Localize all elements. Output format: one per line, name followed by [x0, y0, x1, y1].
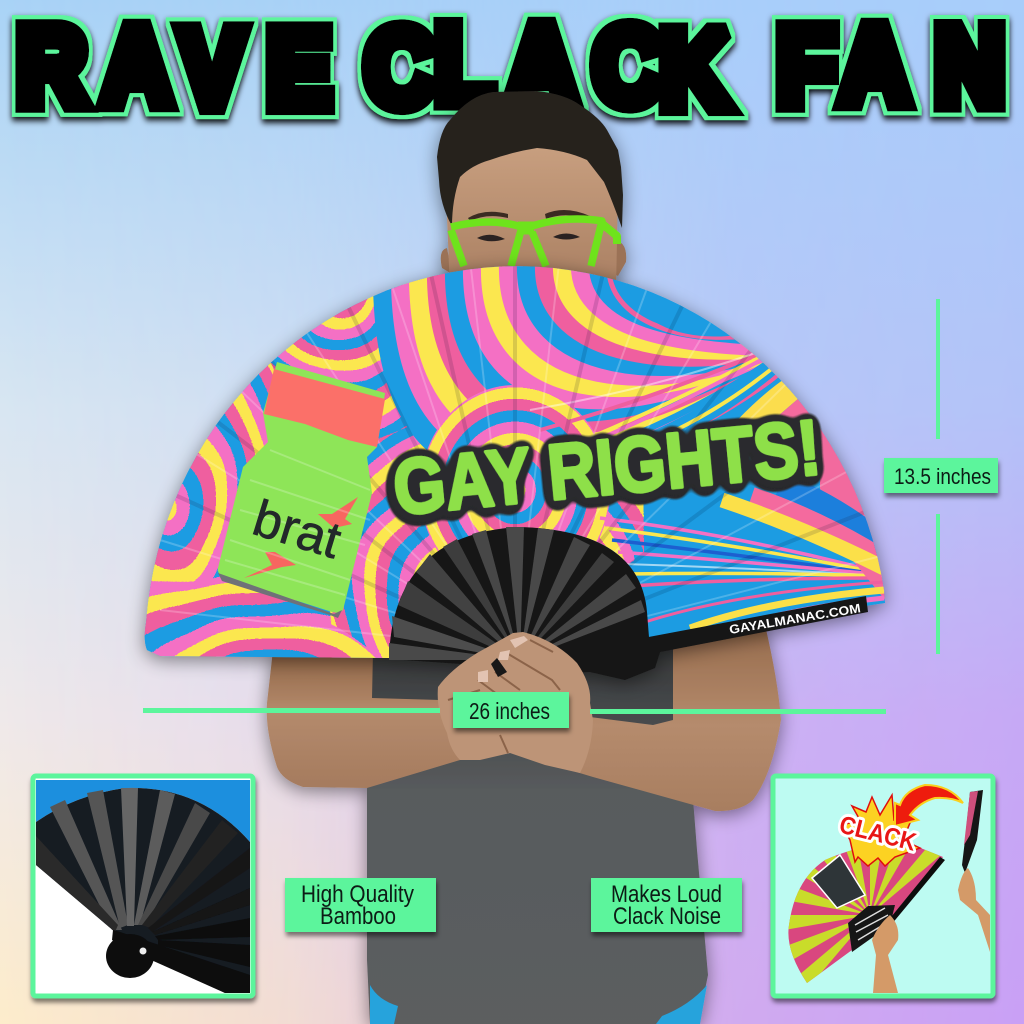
- finger lines: [448, 640, 560, 753]
- fingernails: [478, 636, 528, 682]
- lightning top: [318, 497, 358, 528]
- swirl bands top: [373, 266, 766, 450]
- inset panel: bamboo: [33, 776, 253, 996]
- shirt: [367, 630, 708, 1024]
- blue fabric: [36, 780, 250, 842]
- bottle red band: [264, 369, 385, 447]
- inset frame: [33, 776, 253, 996]
- small open fan: [788, 848, 945, 983]
- bottle: [218, 362, 385, 618]
- black bamboo ribs: [389, 527, 650, 668]
- hair: [437, 91, 623, 228]
- label: 26 inches: [453, 692, 569, 728]
- shorts: [370, 985, 707, 1024]
- small ribs: [848, 905, 895, 952]
- label: 13.5 inches: 13.5 inches: [894, 464, 991, 489]
- fabric base: [144, 266, 888, 658]
- clack word: CLACK: [837, 811, 919, 857]
- inset panel: clack demo: [760, 776, 993, 999]
- ears: [441, 240, 626, 276]
- label: makes loud clack noise: [591, 878, 742, 932]
- eyebrows: [468, 210, 590, 221]
- pivot: [106, 934, 154, 978]
- rib slats: [36, 788, 250, 967]
- ribs background: [36, 788, 250, 993]
- label: high quality bamboo: High Quality: [301, 881, 414, 908]
- starburst: [842, 795, 920, 866]
- bottle base shadow: [218, 573, 342, 618]
- hands: [438, 632, 593, 773]
- ray bundle lower: [600, 518, 885, 586]
- label: 26 inches: 26 inches: [469, 698, 550, 724]
- holding arm lower: [872, 915, 898, 993]
- eyes: [477, 234, 580, 241]
- label: makes loud clack noise: Makes Loud: [611, 881, 722, 908]
- green glasses: [451, 219, 617, 266]
- right arm: [513, 620, 781, 811]
- fan: [133, 258, 896, 688]
- face: [445, 140, 618, 290]
- small handle: [887, 857, 945, 925]
- yellow edge cap: [658, 285, 720, 318]
- handle url text: GAYALMANAC.COM: [728, 601, 862, 637]
- red arrow: [895, 785, 963, 826]
- swirl patches left: [144, 281, 644, 658]
- ring: [491, 658, 507, 677]
- handle: [112, 930, 250, 993]
- dimension line: width: [143, 708, 886, 714]
- gay rights headline: GAY RIGHTS!: [390, 403, 824, 531]
- center lobe: [425, 385, 609, 552]
- inset frame: [773, 776, 993, 996]
- closed fan: [962, 790, 983, 873]
- fan handle: [496, 596, 868, 680]
- lightning bottom: [244, 552, 296, 578]
- bottle highlight lines: [225, 450, 370, 595]
- head: [437, 91, 626, 290]
- big stripes upper right: [738, 381, 827, 439]
- fabric creases: [160, 255, 885, 650]
- clasped hands: [438, 632, 593, 773]
- left arm: [267, 650, 510, 788]
- label: high quality bamboo: Bamboo: [320, 903, 396, 930]
- bell icon: [812, 855, 865, 908]
- label: 13.5 inches: [884, 458, 998, 493]
- holding arm upper: [958, 868, 990, 952]
- big stripes lower right: [720, 428, 885, 600]
- brat label: brat: [247, 489, 347, 569]
- label: high quality bamboo: [285, 878, 436, 932]
- label: makes loud clack noise: Clack Noise: [613, 903, 721, 930]
- dimension line: height: [936, 299, 940, 654]
- ray bundle upper: [530, 353, 788, 436]
- bottle body: [218, 362, 385, 613]
- bottom stripes: [645, 582, 884, 628]
- person: [267, 91, 781, 1024]
